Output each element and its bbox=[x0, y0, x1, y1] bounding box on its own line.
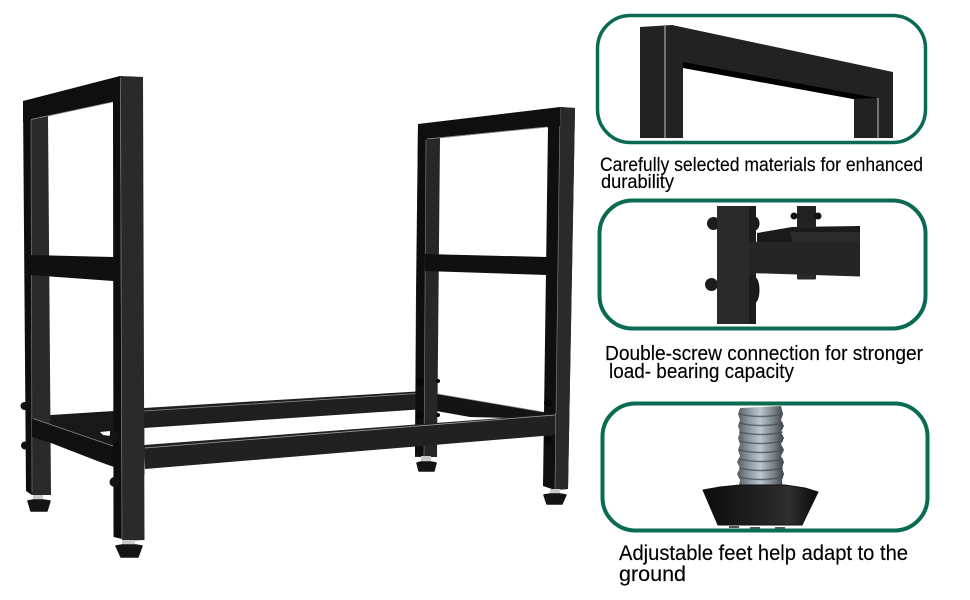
right frame bolts bbox=[416, 378, 552, 444]
panel: materials detail bbox=[598, 16, 926, 193]
left bolts bbox=[20, 402, 29, 450]
right frame middle rail bbox=[425, 254, 547, 275]
caption: connection: load- bearing capacity bbox=[609, 360, 795, 383]
adjustable foot front left bbox=[116, 540, 142, 557]
front base rail bbox=[144, 414, 567, 469]
caption: adjustable feet: Adjustable feet help adapt to the bbox=[619, 542, 908, 565]
base screws bbox=[729, 526, 785, 529]
green rounded border bbox=[600, 200, 926, 328]
rear base rail bbox=[144, 391, 425, 428]
left frame middle rail bbox=[30, 255, 120, 282]
caption: connection bbox=[605, 342, 923, 383]
left front post overlap bbox=[122, 420, 144, 475]
right side base rail bbox=[425, 392, 556, 418]
caption: adjustable feet bbox=[619, 542, 908, 586]
caption: connection: Double-screw connection for stronger bbox=[605, 342, 923, 365]
caption: materials bbox=[600, 154, 923, 193]
bracket closeup bbox=[705, 206, 860, 324]
panel: adjustable feet detail bbox=[602, 404, 928, 586]
left frame front post bbox=[113, 76, 122, 539]
left side inner rail bbox=[32, 411, 114, 447]
left side base rail bbox=[32, 418, 114, 467]
frame corner closeup bbox=[640, 25, 893, 138]
gap behind side rail bbox=[100, 431, 110, 436]
right front post overlap bbox=[555, 413, 568, 436]
green rounded border bbox=[602, 404, 928, 530]
left frame bbox=[20, 76, 144, 541]
adjustable foot rear left bbox=[28, 495, 50, 511]
panel: double-screw connection detail bbox=[600, 200, 926, 383]
adjustable foot rear right bbox=[417, 456, 436, 471]
left frame rear post bbox=[31, 114, 51, 495]
green rounded border bbox=[598, 16, 926, 142]
front bolts bbox=[110, 431, 120, 487]
caption: adjustable feet: ground bbox=[619, 563, 686, 586]
right frame front post bbox=[543, 107, 575, 490]
right frame top rail bbox=[418, 107, 560, 141]
adjustable foot front right bbox=[544, 489, 566, 504]
right frame rear post bbox=[415, 124, 440, 457]
right frame bbox=[415, 107, 575, 490]
leveling foot photo bbox=[703, 406, 818, 529]
rubber base bbox=[703, 485, 818, 525]
threaded bolt bbox=[737, 406, 784, 490]
product photo: black metal rack bbox=[20, 76, 575, 557]
caption: materials: Carefully selected materials for enhanced bbox=[600, 154, 923, 176]
caption: materials: durability bbox=[601, 171, 674, 193]
left frame top rail bbox=[23, 76, 120, 122]
